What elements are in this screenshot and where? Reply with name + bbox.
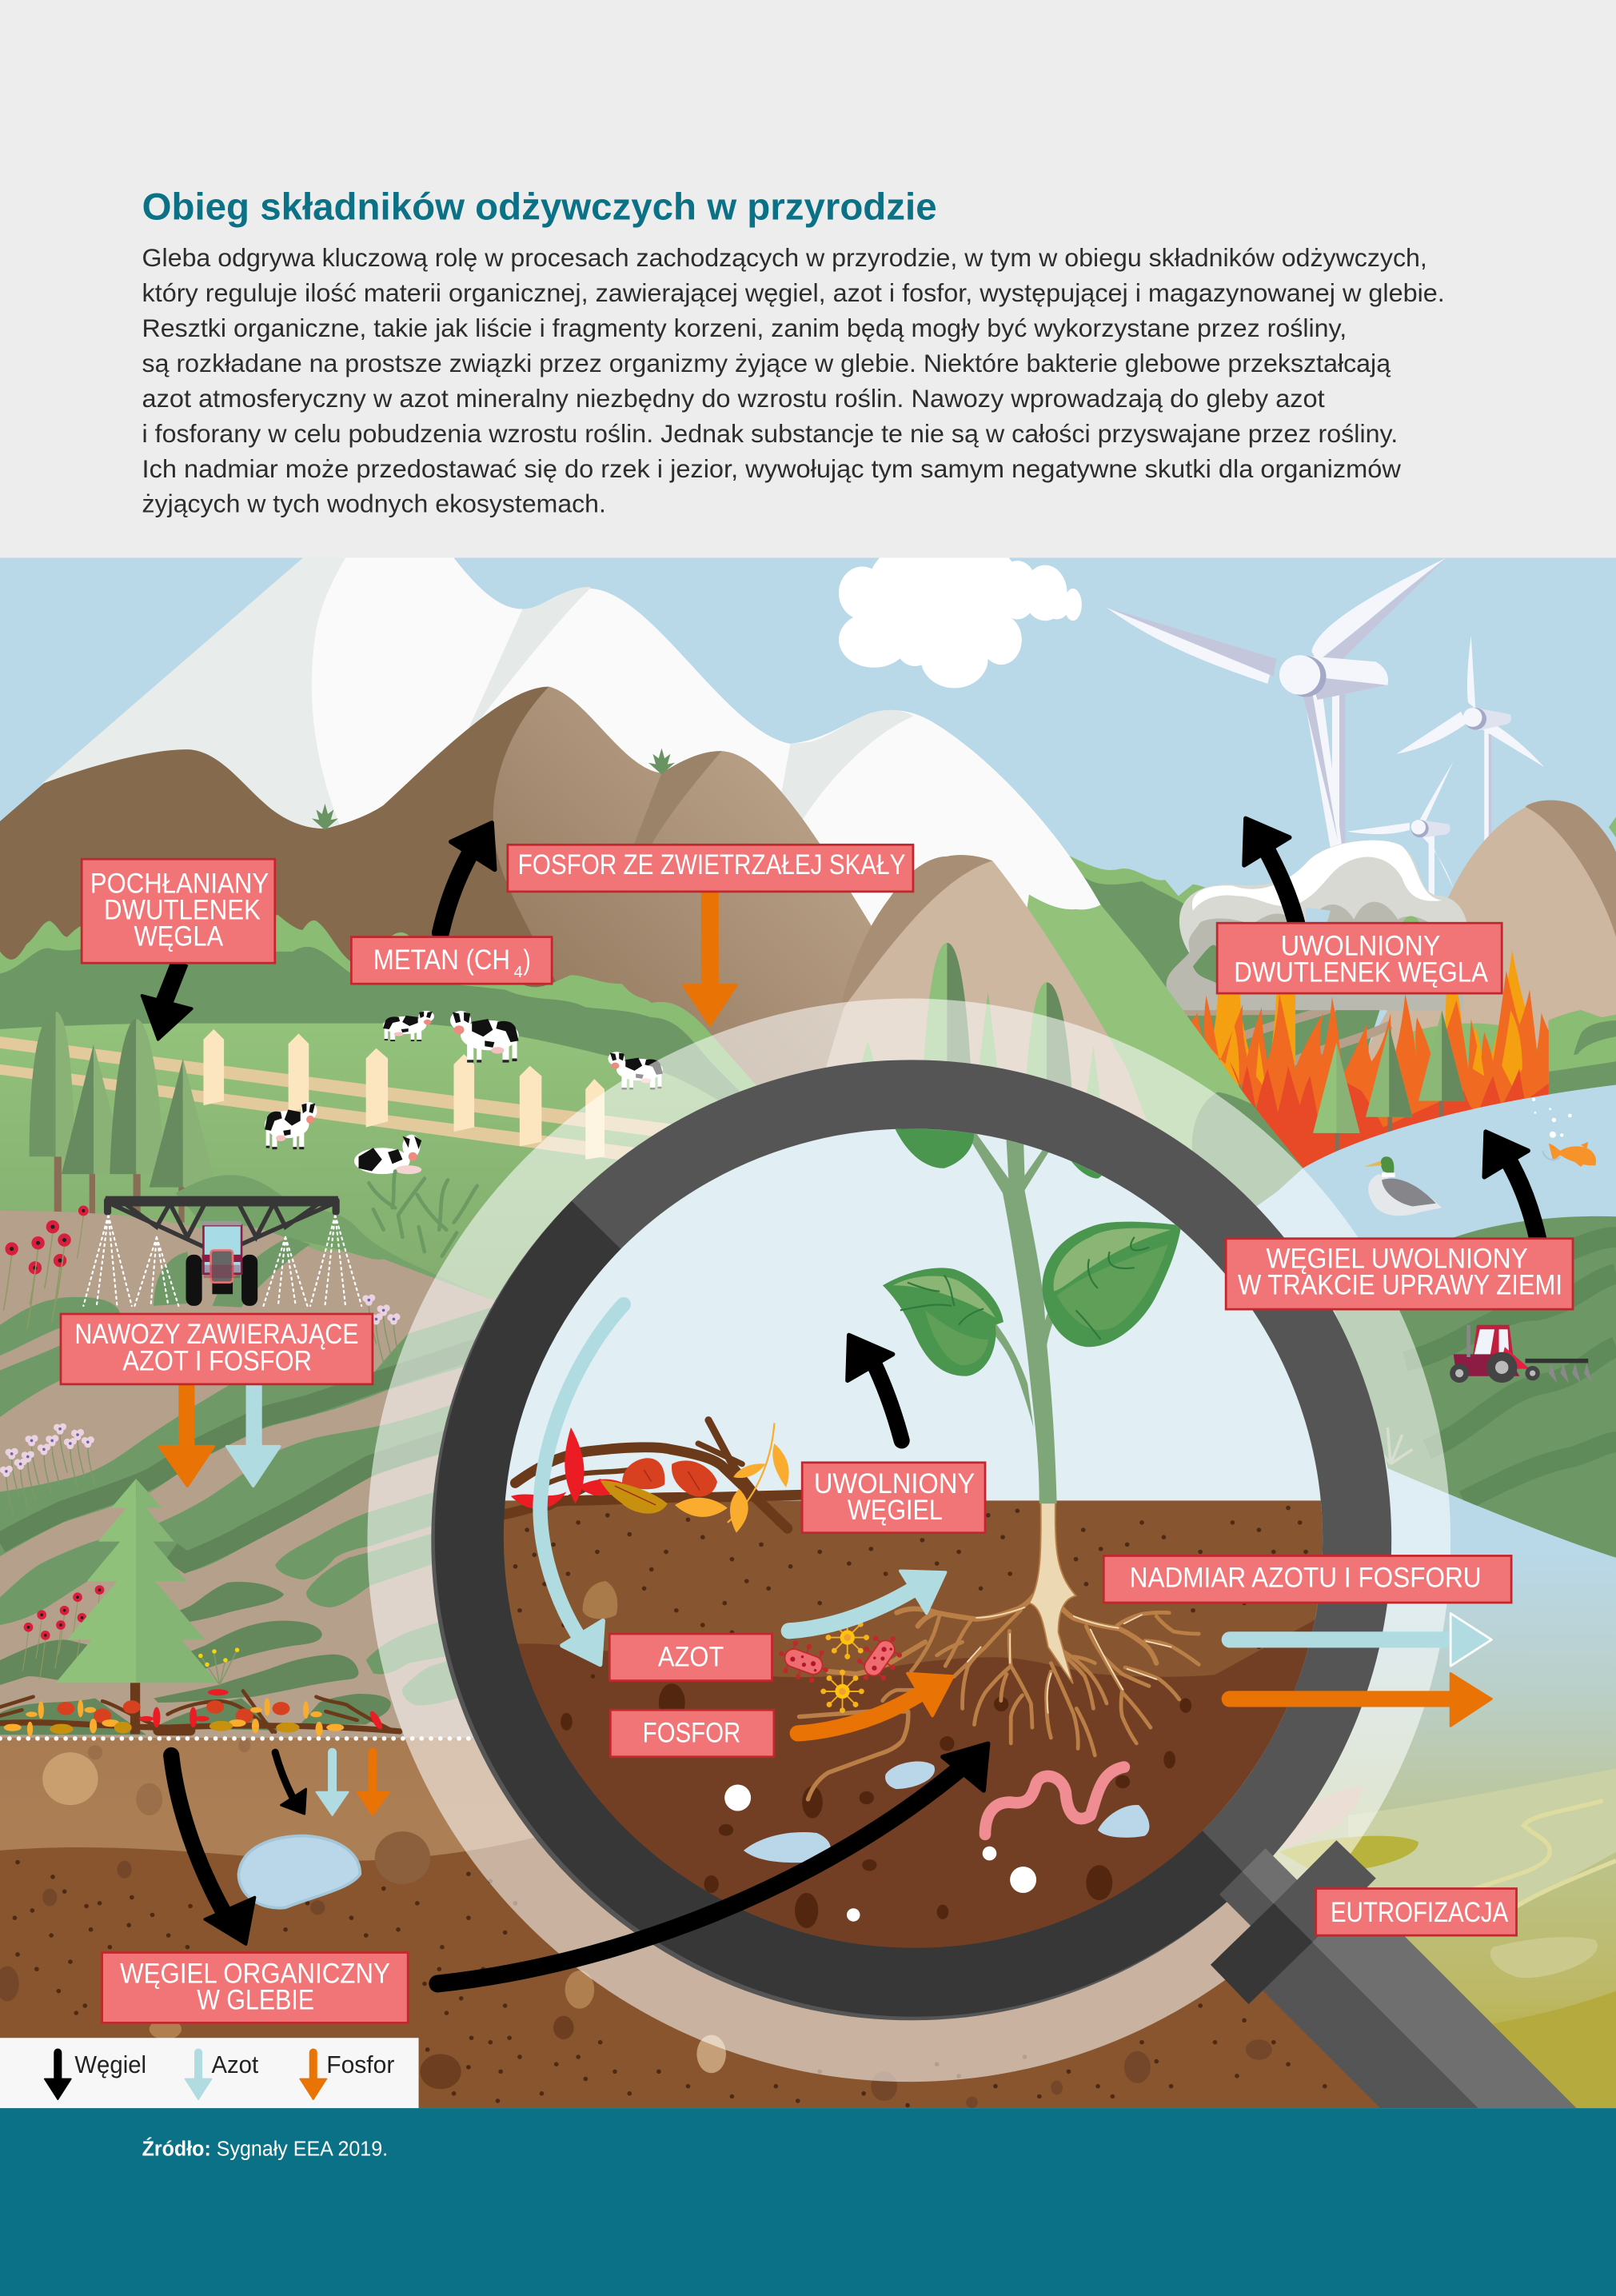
label: phosphorus from weathered rock: FOSFOR ZE ZWIETRZAŁEJ SKAŁY xyxy=(518,850,905,880)
reeds xyxy=(1373,1428,1413,1464)
plant roots xyxy=(800,1595,1199,1799)
plant stem xyxy=(915,1128,1152,1503)
darker hill behind the sprayer xyxy=(176,1175,437,1278)
magnifier handle xyxy=(1211,1840,1577,2108)
label: eutrophication: EUTROFIZACJA xyxy=(1331,1898,1509,1928)
arrow: fertiliser phosphorus xyxy=(160,1384,213,1486)
intro text block: który reguluje ilość materii organicznej, zawierającej węgiel, azot i fosfor, występującej i magazynowanej w glebie. xyxy=(142,278,1445,307)
soil stones xyxy=(0,1738,1272,2108)
cloud xyxy=(839,558,1082,688)
green hills band xyxy=(0,915,756,1100)
intro text block: Ich nadmiar może przedostawać się do rzek i jezior, wywołując tym samym negatywne skutki dla organizmów xyxy=(142,454,1402,483)
forest trees xyxy=(30,1012,217,1223)
arrow: carbon into soil xyxy=(171,1755,255,1944)
magnified soil view xyxy=(490,1120,1332,1962)
intro text block: Resztki organiczne, takie jak liście i fragmenty korzeni, zanim będą mogły być wykorzystane przez rośliny, xyxy=(142,313,1347,342)
duck xyxy=(1364,1156,1442,1216)
label: absorbed carbon dioxide xyxy=(82,859,275,963)
fish xyxy=(1532,1098,1596,1167)
legend: nitrogen xyxy=(186,2052,259,2099)
dotted ground line xyxy=(0,1737,471,1739)
label: excess nitrogen and phosphorus xyxy=(1103,1555,1511,1603)
pink flowers xyxy=(0,1294,401,1515)
lens light stone xyxy=(583,1581,617,1619)
label: fertilisers: NAWOZY ZAWIERAJĄCE xyxy=(74,1320,359,1350)
legend xyxy=(0,2038,419,2108)
label: nitrogen: AZOT xyxy=(658,1642,724,1672)
wind turbine: large xyxy=(1107,557,1446,851)
soil water droplets and minerals xyxy=(724,1761,1149,1922)
tap root xyxy=(1029,1502,1076,1683)
label: carbon released in tillage: WĘGIEL UWOLNIONY xyxy=(1266,1244,1528,1274)
legend: carbon xyxy=(45,2052,146,2099)
illustrated scene xyxy=(0,533,1616,2111)
sprayer tractor xyxy=(83,1196,361,1306)
arrow: excess phosphorus xyxy=(1230,1673,1491,1726)
label: released carbon xyxy=(802,1463,985,1533)
snow mountains xyxy=(42,558,1101,926)
water pocket in soil xyxy=(238,1836,360,1908)
magnifier glass halo xyxy=(367,999,1450,2082)
arrow: methane xyxy=(441,823,495,932)
legend: phosphorus xyxy=(300,2052,394,2099)
tan foothill xyxy=(826,855,1147,1185)
arrow: phosphorus from rock xyxy=(684,892,736,1024)
fire xyxy=(1188,950,1549,1179)
label: excess nitrogen and phosphorus: NADMIAR AZOTU I FOSFORU xyxy=(1130,1563,1482,1593)
intro text block: azot atmosferyczny w azot mineralny niezbędny do wzrostu roślin. Nawozy wprowadzają do gleby azot xyxy=(142,384,1325,413)
lens fallen leaves xyxy=(511,1423,789,1533)
title: Obieg składników odżywczych w przyrodzie xyxy=(142,186,937,229)
small soil arrows xyxy=(275,1752,389,1815)
trees behind the lens xyxy=(855,943,1110,1172)
arrow: excess nitrogen xyxy=(1230,1613,1491,1666)
green crop strips xyxy=(0,1237,505,1735)
left field xyxy=(0,1211,908,1757)
intro text block: żyjących w tych wodnych ekosystemach. xyxy=(142,489,606,518)
meadow plants xyxy=(369,1172,477,1256)
lens dead branches xyxy=(499,1420,808,1528)
lens specks xyxy=(515,1508,1306,1676)
yellow flowers xyxy=(198,1647,239,1685)
label: carbon released in tillage: W TRAKCIE UPRAWY ZIEMI xyxy=(1238,1270,1562,1300)
leaf litter on the surface xyxy=(0,1689,400,1736)
green slope xyxy=(1027,894,1303,1228)
cows xyxy=(265,1011,663,1174)
legend: nitrogen: Azot xyxy=(212,2052,259,2078)
intro text block: i fosforany w celu pobudzenia wzrostu roślin. Jednak substancje te nie są w całości przyswajane przez rośliny. xyxy=(142,419,1398,448)
trees in front of the fire xyxy=(1313,1010,1465,1154)
label: methane: 4 xyxy=(514,964,523,981)
arrow: fertiliser nitrogen xyxy=(227,1384,280,1486)
meadow xyxy=(0,1024,735,1301)
earthworm xyxy=(985,1767,1124,1835)
wetland banks xyxy=(1274,1768,1616,2108)
brown mountain range xyxy=(0,686,872,1086)
label: absorbed carbon dioxide: DWUTLENEK xyxy=(104,896,261,926)
label: methane: METAN (CH xyxy=(373,945,510,976)
right tan mountain xyxy=(1369,801,1616,1112)
legend: phosphorus: Fosfor xyxy=(326,2052,394,2078)
label: released carbon dioxide: UWOLNIONY xyxy=(1281,931,1440,961)
arrow: nitrogen curve into soil xyxy=(540,1304,624,1664)
soil xyxy=(0,1738,1383,2111)
label: methane xyxy=(351,937,552,984)
magnifier ring xyxy=(465,1094,1357,1986)
label: methane: ) xyxy=(523,945,531,976)
green hill with waves xyxy=(1325,1216,1616,1558)
intro text block: Gleba odgrywa kluczową rolę w procesach zachodzących w przyrodzie, w tym w obiegu składników odżywczych, xyxy=(142,243,1427,272)
label: fertilisers xyxy=(61,1314,373,1384)
label: released carbon dioxide: DWUTLENEK WĘGLA xyxy=(1234,957,1489,988)
red tractor with harrow xyxy=(1450,1325,1593,1384)
label: organic carbon in soil: W GLEBIE xyxy=(197,1985,314,2015)
red flowers xyxy=(22,1585,104,1679)
source note: Źródło: Sygnały EEA 2019. xyxy=(142,2138,388,2161)
page header background xyxy=(0,0,1616,557)
arrow: phosphorus to roots xyxy=(798,1673,953,1733)
lens sky xyxy=(490,1120,1332,1962)
arrow: carbon absorbed xyxy=(142,962,192,1040)
lens soil xyxy=(490,1500,1332,1962)
label: phosphorus: FOSFOR xyxy=(643,1718,740,1748)
wind turbine: medium xyxy=(1396,636,1544,841)
arrow: carbon released by tillage xyxy=(1484,1132,1538,1241)
field behind the fire xyxy=(1183,1010,1616,1109)
label: absorbed carbon dioxide: POCHŁANIANY xyxy=(90,869,269,900)
plant leaves xyxy=(883,1128,1181,1376)
label: organic carbon in soil xyxy=(102,1953,408,2022)
lake xyxy=(1171,1085,1616,1611)
arrow: released carbon from soil xyxy=(848,1336,902,1440)
water flowing to eutrophic wetland xyxy=(1171,1468,1616,2108)
arrow: released carbon dioxide xyxy=(1244,818,1297,925)
label: nitrogen xyxy=(609,1634,772,1681)
label: released carbon dioxide xyxy=(1217,923,1502,993)
label: eutrophication xyxy=(1316,1889,1517,1935)
smoke xyxy=(1167,841,1468,1010)
soil specks xyxy=(14,1863,1325,2105)
intro text block: są rozkładane na prostsze związki przez organizmy żyjące w glebie. Niektóre bakterie glebowe przekształcają xyxy=(142,349,1391,377)
back green hill xyxy=(1069,856,1206,984)
fir tree xyxy=(56,1479,217,1734)
arrow: nitrogen to roots xyxy=(789,1571,946,1631)
sky xyxy=(0,558,1616,1241)
poppies xyxy=(3,1205,89,1329)
label: phosphorus from weathered rock xyxy=(508,845,913,892)
label: phosphorus xyxy=(610,1710,774,1757)
label: carbon released in tillage xyxy=(1226,1239,1573,1309)
label: fertilisers: AZOT I FOSFOR xyxy=(122,1346,312,1376)
wind turbine: small xyxy=(1347,761,1454,896)
legend: carbon: Węgiel xyxy=(74,2052,146,2078)
label: released carbon: WĘGIEL xyxy=(848,1495,943,1526)
footer band xyxy=(0,2108,1616,2296)
soil microbes xyxy=(773,1616,909,1712)
fence xyxy=(0,1029,673,1165)
intro text block xyxy=(142,243,1445,518)
arrow: organic carbon to plant roots xyxy=(437,1743,988,1984)
label: organic carbon in soil: WĘGIEL ORGANICZNY xyxy=(120,1959,390,1989)
agave plants on the ridges xyxy=(312,748,675,830)
label: absorbed carbon dioxide: WĘGLA xyxy=(134,922,224,952)
label: released carbon: UWOLNIONY xyxy=(814,1469,975,1499)
lens stones xyxy=(561,1683,1191,1928)
